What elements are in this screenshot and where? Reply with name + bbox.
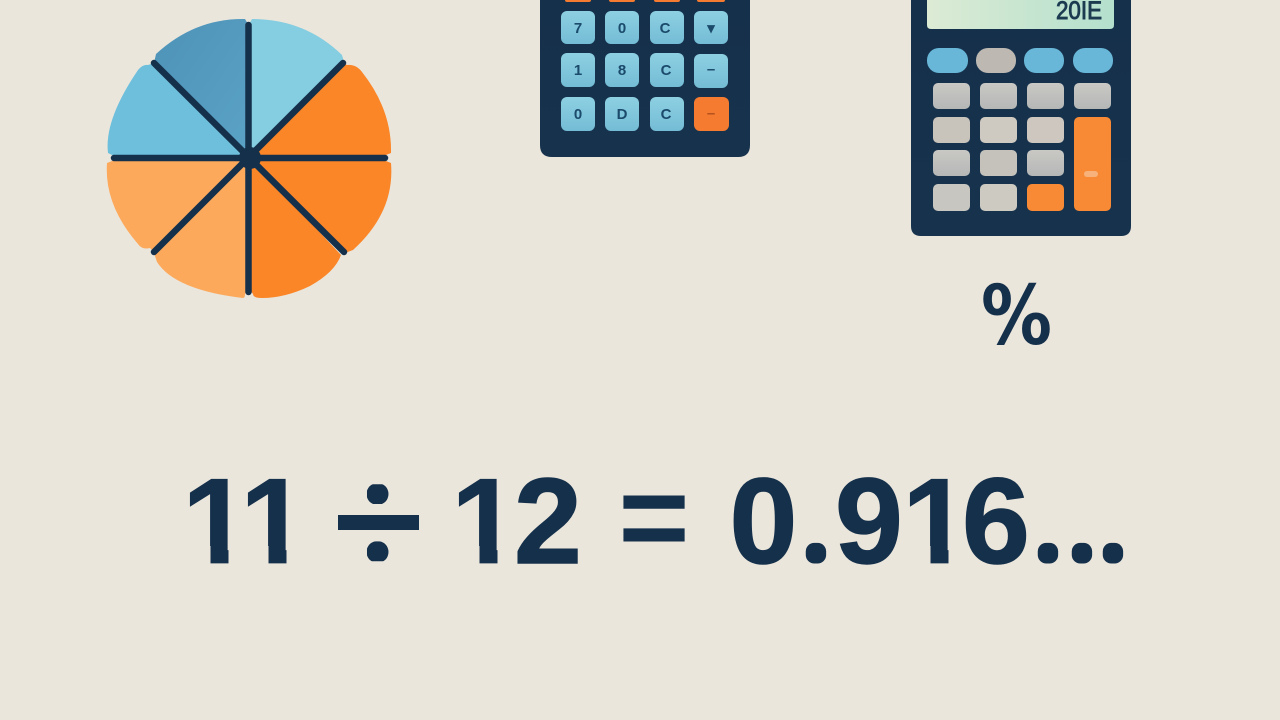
digit ones [190, 478, 948, 564]
decimal point and ellipsis with rounded dots: . [813, 534, 819, 561]
digit six: 6 [962, 453, 1030, 589]
digit zero: 0 [730, 453, 797, 589]
calculator body [540, 0, 750, 157]
key labels: 1 [574, 62, 582, 79]
icon: small calculator with blue keys [540, 0, 750, 157]
decimal point and ellipsis with rounded dots: . [1045, 534, 1051, 561]
key labels: 0 [574, 106, 582, 123]
decimal point and ellipsis with rounded dots: . [1110, 534, 1116, 561]
division sign: ÷ [334, 439, 422, 604]
slice: dark blue top left [154, 19, 250, 158]
key labels: C [661, 62, 672, 79]
key labels: C [660, 20, 671, 37]
percent sign: % [981, 269, 1052, 364]
key labels: – [707, 105, 715, 122]
calculator body [911, 0, 1131, 236]
orange key [694, 97, 729, 131]
infographic canvas [106, 0, 1131, 565]
decimal point and ellipsis with rounded dots: . [1079, 534, 1085, 561]
key labels: 8 [618, 62, 626, 79]
pie centre hub [239, 147, 261, 169]
digit ones: 1 [240, 453, 308, 589]
top row function keys [927, 48, 1113, 73]
blue key grid [561, 11, 728, 131]
digit two: 2 [514, 453, 582, 589]
equals sign: = [618, 449, 690, 585]
slice: mid blue upper left [108, 63, 250, 158]
digit ones: 1 [182, 453, 250, 589]
slice divider lines [114, 25, 385, 292]
slice: orange bottom right [250, 158, 341, 298]
slice: orange lower right [250, 158, 391, 253]
key labels: D [617, 106, 628, 123]
orange keys [1027, 117, 1111, 211]
key labels: C [661, 106, 672, 123]
digit ones: 1 [902, 453, 970, 589]
key labels: 0 [618, 20, 626, 37]
decimal point and ellipsis with rounded dots [813, 534, 1116, 561]
orange keys cut off at top edge [565, 0, 725, 2]
icon: large calculator with display [911, 0, 1131, 236]
digit nine: 9 [835, 453, 903, 589]
grey number keys [933, 83, 1111, 211]
equation: 11 ÷ 12 = 0.916... [190, 477, 1124, 565]
slice: light blue top right [249, 19, 344, 158]
orange key minus mark [1084, 171, 1098, 177]
icon: pie chart divided into eight slices [107, 19, 391, 298]
display screen [927, 0, 1114, 29]
slice: light orange bottom left [154, 158, 250, 298]
key labels [574, 20, 715, 123]
digit ones: 1 [451, 453, 519, 589]
slice: light orange lower left [107, 158, 250, 252]
key labels: 7 [574, 20, 582, 37]
key labels: – [707, 61, 715, 78]
slice: orange upper right [250, 63, 391, 158]
key labels: ▾ [706, 20, 715, 37]
